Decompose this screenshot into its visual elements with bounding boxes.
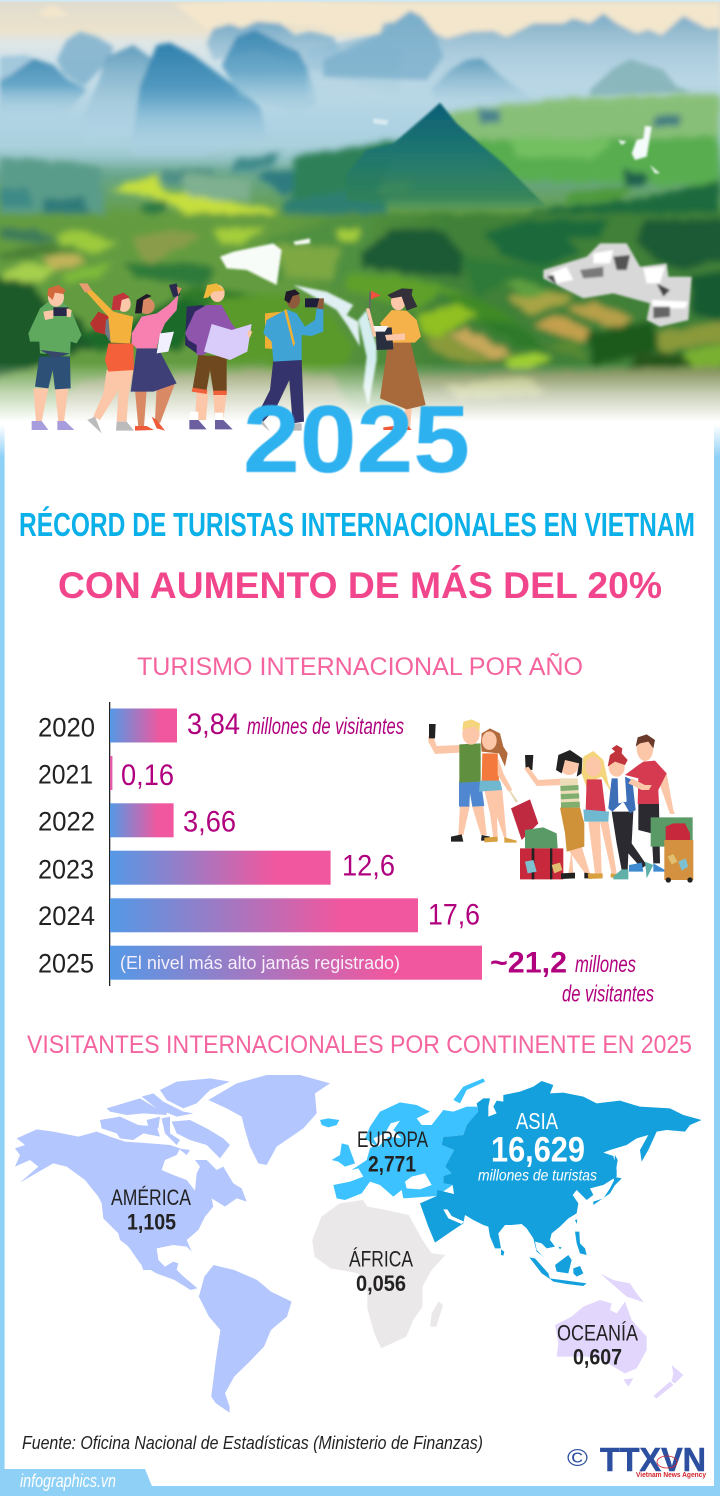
luggage pile (508, 790, 563, 879)
label: Europe: EUROPA (357, 1127, 428, 1152)
bar 2025: de visitantes (562, 981, 654, 1007)
map region: Oceania (555, 1273, 683, 1398)
bar 2020: 3,84 (187, 708, 240, 741)
bar 2022 (38, 803, 236, 839)
bar 2021: 0,16 (121, 759, 174, 792)
footer tab: infographics.vn (0, 1469, 156, 1496)
label: Asia (478, 1108, 597, 1185)
bar 2024 (38, 898, 480, 932)
map region: Africa (312, 1200, 445, 1348)
hero landscape photo (0, 0, 720, 460)
label: Africa: 0,056 (356, 1271, 406, 1296)
bar 2020: millones de visitantes (247, 713, 404, 739)
year heading 2025: 2025 (243, 386, 470, 493)
label: America (111, 1185, 191, 1234)
label: Asia: ASIA (516, 1108, 559, 1134)
bar 2025: ~21,2 (490, 947, 567, 980)
group of four friends (524, 734, 675, 879)
label: America: AMÉRICA (111, 1185, 191, 1210)
illustration: tourists with luggage (428, 719, 693, 883)
bar 2025 (38, 946, 654, 1007)
title line 2: CON AUMENTO DE MÁS DEL 20% (58, 565, 662, 606)
label: America: 1,105 (127, 1209, 176, 1234)
bar 2025: (El nivel más alto jamás registrado) (120, 953, 400, 973)
logo: TTXVN Vietnam News Agency: Vietnam News Agency (636, 1470, 707, 1479)
suitcases on the right (651, 817, 693, 883)
lower right fields (347, 220, 720, 433)
distant waterfall (373, 118, 660, 173)
logo: TTXVN Vietnam News Agency: © (567, 1445, 588, 1472)
map region: Europe (320, 1078, 485, 1200)
upper left fields (0, 140, 387, 220)
logo: TTXVN Vietnam News Agency: TTXVN (600, 1441, 706, 1478)
bar 2024: 17,6 (428, 898, 480, 931)
bar 2021: 2021 (38, 759, 93, 789)
central peak (347, 103, 547, 213)
mountains (0, 0, 720, 157)
bar 2023: 12,6 (342, 850, 395, 883)
bar 2022: 2022 (38, 807, 95, 837)
label: Oceania (557, 1321, 638, 1369)
tourist guide in long brown skirt with flag (366, 288, 426, 430)
world map (15, 1075, 702, 1413)
label: Africa (349, 1247, 413, 1296)
label: Oceania: 0,607 (573, 1344, 622, 1369)
label: Asia: 16,629 (491, 1131, 585, 1170)
label: Europe: 2,771 (368, 1152, 416, 1177)
label: Asia: millones de turistas (478, 1168, 597, 1185)
tourist in pink top and navy skirt (131, 283, 182, 431)
bar 2020 (38, 708, 404, 743)
bar 2023 (38, 850, 395, 885)
map region: America (15, 1075, 330, 1413)
lower left fields (0, 220, 373, 433)
central peak, rivers and village (220, 103, 692, 407)
label: Oceania: OCEANÍA (557, 1321, 638, 1346)
bar 2023: 2023 (38, 854, 94, 884)
tourist in purple hoodie with map (185, 283, 252, 429)
white fade at bottom of photo (0, 362, 720, 432)
label: Africa: ÁFRICA (349, 1247, 413, 1272)
source note: Fuente: Oficina Nacional de Estadísticas (Ministerio de Finanzas) (22, 1433, 483, 1453)
river in the valley (220, 238, 360, 347)
bar chart: visitors per year (38, 702, 654, 1007)
tourist in green hoodie (28, 285, 82, 430)
village (543, 243, 692, 327)
tourist in blue shirt with camera (257, 289, 324, 432)
tourist in yellow shirt pointing upward (79, 283, 134, 433)
couple taking a selfie (428, 719, 517, 843)
illustration: group of six tourists (28, 283, 426, 433)
bar 2025: millones (575, 951, 636, 977)
bar 2021 (38, 756, 174, 792)
mist over the lower mountains (0, 85, 720, 170)
map region: Asia (420, 1081, 702, 1286)
bar 2022: 3,66 (183, 806, 236, 839)
bar 2025: 2025 (38, 948, 94, 978)
side and bottom page frame (0, 425, 720, 1496)
bar 2024: 2024 (38, 901, 95, 931)
bar 2020: 2020 (38, 713, 95, 743)
upper right fields (293, 93, 720, 220)
label: Europe (357, 1127, 428, 1177)
footer tab: infographics.vn: infographics.vn (20, 1471, 116, 1491)
valley fields and forest (0, 93, 720, 433)
base colour of the lower valley (0, 213, 720, 433)
section heading: tourism per year: TURISMO INTERNACIONAL POR AÑO (137, 652, 583, 681)
